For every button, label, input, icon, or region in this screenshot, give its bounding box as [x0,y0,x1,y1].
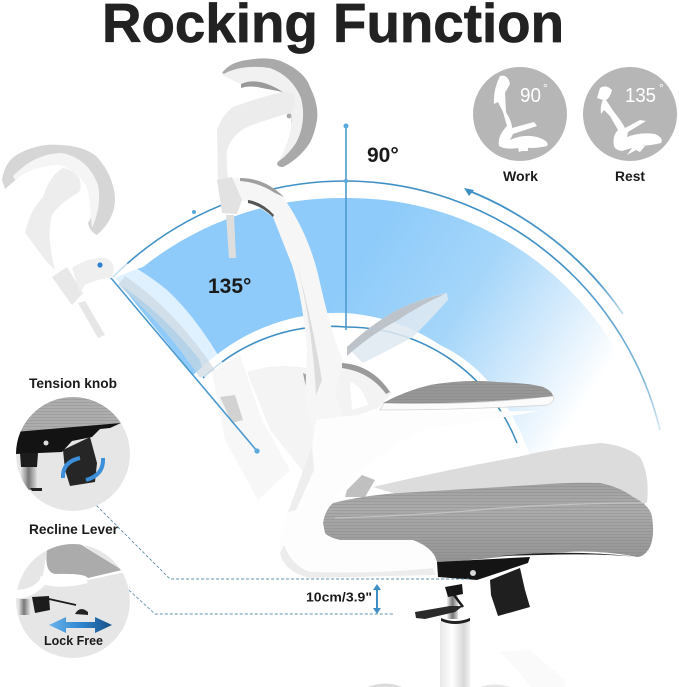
tension knob detail circle [15,395,130,511]
height knob [490,568,530,616]
seat cushion [323,483,653,562]
rest label: Rest [615,169,646,184]
gas lift and lever [415,584,470,687]
label 90 degrees: 90° [367,144,399,167]
rest mode icon: ° [659,81,664,95]
upright headrest [217,58,317,180]
recline lever heading: Recline Lever [29,522,119,537]
135 degree line [100,265,257,451]
line end dots [192,124,348,454]
work mode icon: ° [543,81,548,95]
lumbar ring [335,363,392,420]
recline lever detail circle [15,540,130,658]
height double arrow [373,584,381,614]
reclined line end dot [97,262,103,268]
main white frame and armrest [280,381,554,578]
lock free double arrow [49,617,112,633]
blue angle sector [115,198,655,470]
angle lines and arcs [113,126,660,443]
inner arc [203,326,517,443]
rest mode icon [583,67,677,161]
rotation direction arc [467,190,623,314]
label 135 degrees: 135° [208,275,251,298]
upright chair back [233,178,392,470]
seat mechanism [437,557,530,616]
outer arc [113,181,346,277]
height label: 10cm/3.9" [306,590,372,604]
ghost seat [373,443,648,503]
ghost reclined chair back [67,255,290,500]
vertical 90 degree line [345,126,347,330]
arrow head on rotation arc [464,188,474,196]
tension knob rotation arrows [63,458,103,480]
ghost lower back and lumbar [247,366,335,480]
work mode icon: 90 [520,85,541,107]
lock free label: Lock Free [44,634,103,648]
work label: Work [503,169,539,184]
ghost armrest [347,293,448,363]
knob [63,437,97,486]
tension knob heading: Tension knob [29,376,117,391]
headrest clip and post [217,177,242,258]
rest mode icon: 135 [625,85,656,107]
height dashed guide lines [93,502,470,614]
work mode icon [473,67,567,161]
ghost base hints [368,650,565,687]
ghost reclined headrest [2,145,115,338]
